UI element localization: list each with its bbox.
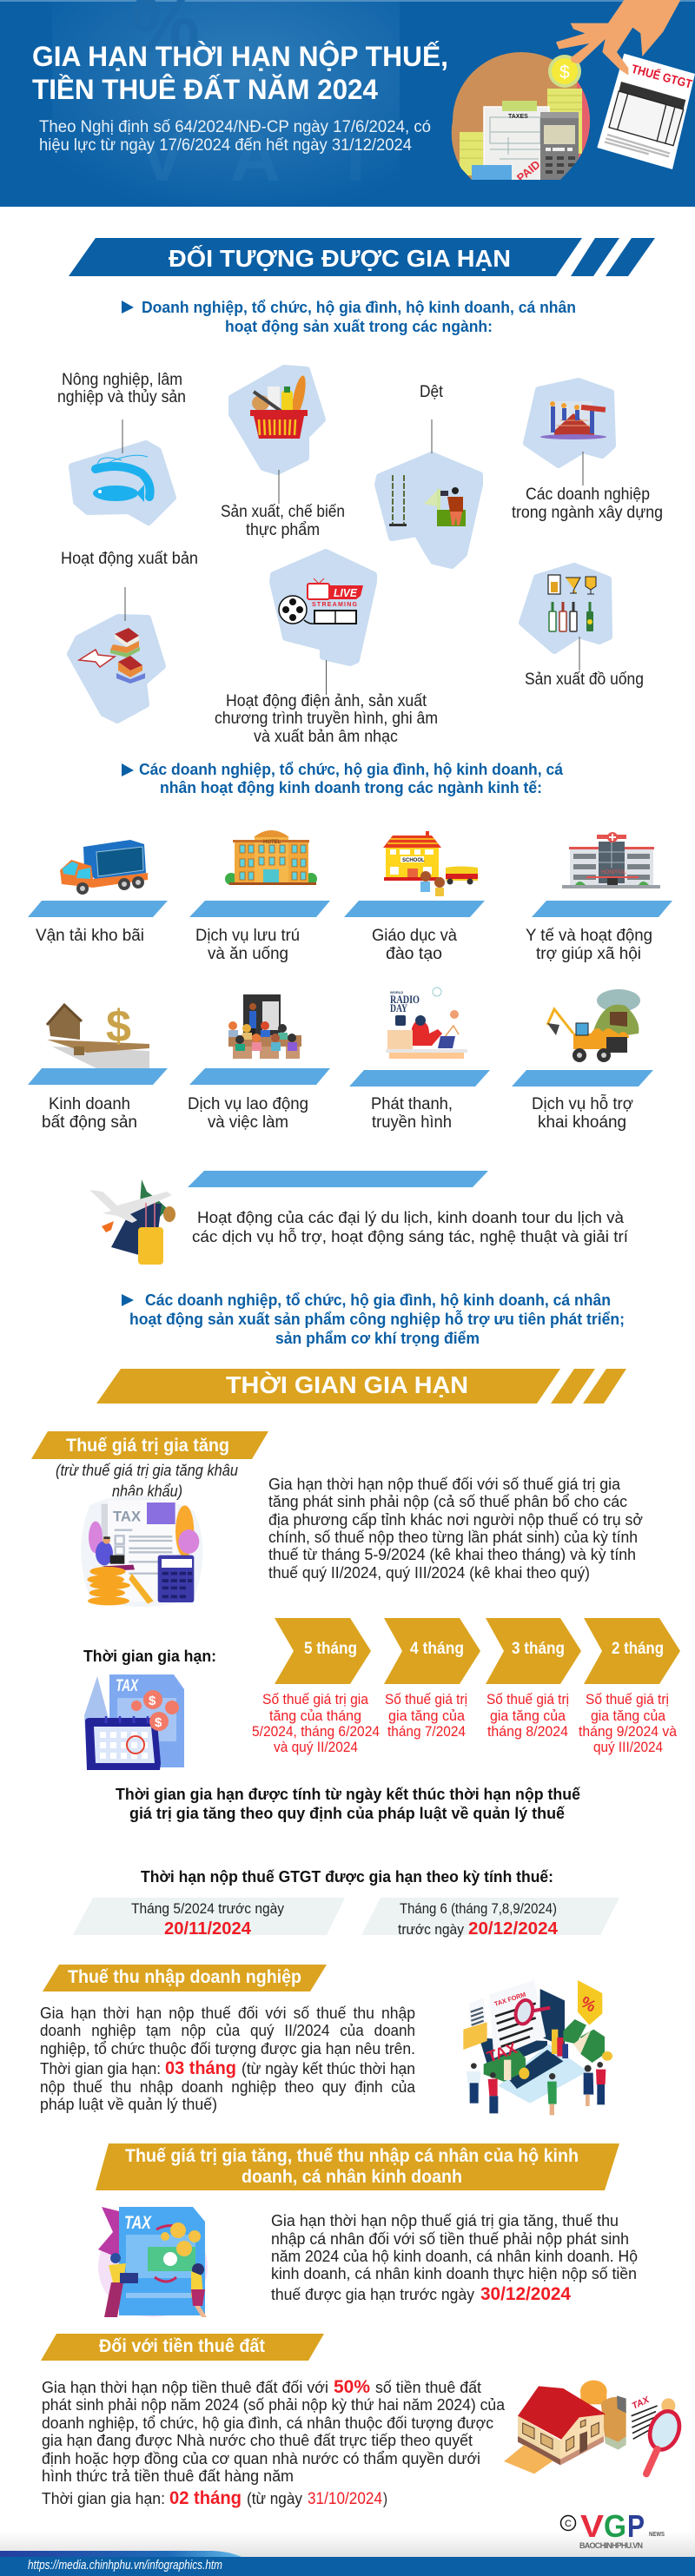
paragraph: tiền thuê đất: 31/10/2024 (308, 2490, 382, 2508)
note: 5 tháng (252, 1692, 380, 1755)
sector: khai khoáng (512, 989, 653, 1132)
note: 5 tháng: 5/2024, tháng 6/2024 (252, 1724, 380, 1740)
paragraph: tiền thuê đất: gia hạn đang được Nhà nước cho thuê đất trực tiếp theo quyết (42, 2431, 473, 2449)
note: 2 tháng: gia tăng của (591, 1708, 666, 1724)
note: cách tính thời gian: giá trị gia tăng theo quy định của pháp luật về quản lý thuế (129, 1804, 566, 1822)
sector: phát thanh: WORLD (390, 990, 403, 994)
paragraph: TNDN: doanh nghiệp tạm nộp của quý II/2024 của doanh (40, 2021, 415, 2039)
sector: phát thanh: truyền hình (372, 1113, 452, 1132)
title (32, 41, 448, 105)
deadline box: tháng 5: Tháng 5/2024 trước ngày (131, 1900, 284, 1917)
industry: điện ảnh: Hoạt động điện ảnh, sản xuất (226, 692, 427, 710)
paragraph: tiền thuê đất: phát sinh phải nộp năm 2024 (số phải nộp kỳ thứ hai năm 2024) của (42, 2395, 506, 2414)
note: 3 tháng: Số thuế giá trị (486, 1692, 569, 1707)
logo: VGP: P (627, 2508, 645, 2544)
note: 2 tháng: quý III/2024 (593, 1740, 663, 1755)
sector: y tế (526, 832, 672, 963)
section banner: đối tượng (69, 238, 655, 276)
industry: điện ảnh: STREAMING (312, 602, 358, 608)
section banner: thời gian (96, 1369, 626, 1404)
paragraph: tiền thuê đất: định hoặc hợp đồng của cơ quan nhà nước có thẩm quyền dưới (42, 2449, 480, 2467)
note: 4 tháng: Số thuế giá trị (385, 1692, 467, 1707)
paragraph: TNDN: 03 tháng (165, 2058, 236, 2078)
paragraph: TNDN: Gia hạn thời hạn nộp thuế đối với số thuế thu nhập (40, 2004, 415, 2022)
paragraph: thuế GTGT: chính, số thuế nộp theo từng lần phát sinh) của kỳ tính (268, 1528, 638, 1546)
heading: thuế GTGT: Thuế giá trị gia tăng (66, 1436, 229, 1456)
chevron timeline (275, 1618, 680, 1684)
sector: lưu trú: và ăn uống (208, 945, 288, 963)
deadline box: tháng 5: 20/11/2024 (164, 1919, 252, 1939)
chevron timeline: 2 tháng (612, 1640, 664, 1658)
subheading: công nghiệp hỗ trợ: sản phẩm cơ khí trọng điểm (275, 1329, 480, 1347)
sector: lao động (188, 994, 330, 1132)
paragraph: tiền thuê đất: 02 tháng (169, 2488, 242, 2508)
icon: tax transfer (98, 2207, 208, 2317)
icon: tax form on laptop: TAX (485, 2038, 520, 2066)
label: thời gian gia hạn: Thời gian gia hạn: (83, 1647, 216, 1665)
chevron timeline: 5 tháng (304, 1640, 357, 1658)
note: 4 tháng (385, 1692, 467, 1740)
icon: tax form on laptop: % (578, 1992, 599, 2016)
heading: hộ kinh doanh (96, 2143, 619, 2190)
paragraph: tiền thuê đất: doanh nghiệp, tổ chức, hộ gia đình, cá nhân thuộc đối tượng được (42, 2414, 493, 2432)
sector: bất động sản: Kinh doanh (49, 1095, 130, 1113)
subheading: công nghiệp hỗ trợ: Các doanh nghiệp, tổ chức, hộ gia đình, hộ kinh doanh, cá nhân (145, 1291, 611, 1309)
paragraph: thuế GTGT: Gia hạn thời hạn nộp thuế đối với số thuế giá trị gia (268, 1475, 621, 1493)
deadline box: tháng 6: Tháng 6 (tháng 7,8,9/2024) (400, 1900, 557, 1917)
industry: đồ uống (522, 566, 644, 689)
paragraph: thuế GTGT: thuế quý II/2024, quý III/2024 (kê khai theo quý) (268, 1563, 590, 1582)
paragraph: thuế GTGT (268, 1475, 643, 1582)
note: 4 tháng: gia tăng của (388, 1708, 466, 1724)
icon: tax documents, calculator, coins in circle (452, 52, 590, 180)
sector: lưu trú (189, 830, 330, 963)
shadow above footer (0, 2532, 695, 2557)
subheading: sản xuất (122, 298, 576, 335)
sector: y tế: trợ giúp xã hội (536, 945, 641, 963)
icon: tax calendar: $ (149, 1694, 156, 1708)
sector: phát thanh: RADIO (390, 993, 420, 1006)
note: 5 tháng: Số thuế giá trị gia (262, 1692, 369, 1707)
deadline box: tháng 6: 20/12/2024 (468, 1919, 559, 1939)
icon: tax form on laptop: TAX FORM (493, 1991, 527, 2008)
paragraph: tiền thuê đất: Gia hạn thời hạn nộp tiền thuê đất đối với (42, 2378, 328, 2396)
logo: VGP: V (580, 2508, 604, 2544)
deadline box: tháng 6: trước ngày (398, 1921, 464, 1938)
icon: hand holding VAT sheet (556, 0, 695, 169)
icon: tax calendar: TAX (116, 1677, 139, 1695)
industry: điện ảnh: chương trình truyền hình, ghi âm (215, 710, 438, 728)
section banner: thời gian: THỜI GIAN GIA HẠN (226, 1371, 468, 1398)
sector: bất động sản: bất động sản (42, 1113, 137, 1132)
sector: lao động: và việc làm (208, 1113, 288, 1132)
paragraph: tiền thuê đất: số tiền thuê đất (375, 2378, 481, 2396)
header band: V (139, 118, 185, 195)
sector: du lịch: các dịch vụ hỗ trợ, hoạt động sáng tác, nghệ thuật và giải trí (192, 1227, 629, 1245)
logo: VGP: BAOCHINHPHU.VN (579, 2541, 643, 2550)
icon: house with coins and magnifier (504, 2381, 685, 2474)
sector: giáo dục: đào tạo (386, 945, 442, 963)
paragraph: thuế GTGT: tăng phát sinh phải nộp (cả số thuế phân bổ cho các (268, 1492, 627, 1510)
paragraph: hộ kinh doanh: kinh doanh, cá nhân kinh doanh thực hiện nộp số tiền (271, 2264, 637, 2282)
paragraph: TNDN (40, 2004, 416, 2113)
industry: nông nghiệp: nghiệp và thủy sản (57, 388, 186, 406)
sector: lưu trú: Dịch vụ lưu trú (195, 927, 300, 945)
sector: y tế: Y tế và hoạt động (526, 927, 652, 945)
note: 3 tháng: gia tăng của (490, 1708, 566, 1724)
sector: giáo dục: SCHOOL (402, 858, 425, 863)
chevron timeline: 3 tháng (512, 1640, 565, 1658)
paragraph: TNDN: nộp thuế thu nhập doanh nghiệp theo quy định của (40, 2077, 416, 2096)
industry: thực phẩm (221, 368, 345, 539)
icon: tax documents, calculator, coins in circle: $ (559, 63, 570, 83)
subheading: công nghiệp hỗ trợ: hoạt động sản xuất sản phẩm công nghiệp hỗ trợ ưu tiên phát triển; (129, 1310, 625, 1328)
note: 2 tháng (579, 1692, 678, 1755)
subheading: kinh doanh: nhân hoạt động kinh doanh trong các ngành kinh tế: (160, 778, 542, 796)
icon: tax form on laptop (463, 1980, 612, 2115)
paragraph: hộ kinh doanh (271, 2211, 638, 2304)
industry: xuất bản (61, 550, 198, 720)
paragraph: tiền thuê đất: Thời gian gia hạn: (42, 2489, 165, 2507)
paragraph: thuế GTGT: địa phương cấp tỉnh khác nơi người nộp thuế có trụ sở (268, 1510, 643, 1529)
heading: TNDN: Thuế thu nhập doanh nghiệp (68, 1967, 301, 1987)
paragraph: TNDN: nghiệp, tổ chức thuộc đối tượng được gia hạn nêu trên. (40, 2039, 415, 2057)
industry: dệt: Dệt (420, 383, 444, 401)
sector: lao động: Dịch vụ lao động (188, 1095, 308, 1113)
note: trừ nhập khẩu: (trừ thuế giá trị gia tăng khâu (56, 1462, 238, 1479)
title: GIA HẠN THỜI HẠN NỘP THUẾ, (32, 41, 448, 72)
deadline box: tháng 6 (361, 1898, 619, 1939)
note: trừ nhập khẩu: nhập khẩu) (112, 1483, 182, 1500)
footer bar: https://media.chinhphu.vn/infographics.htm (28, 2558, 222, 2573)
industry: thực phẩm: thực phẩm (246, 521, 320, 539)
sector: khai khoáng: khai khoáng (538, 1113, 626, 1132)
logo: VGP (561, 2508, 665, 2550)
note: 3 tháng (486, 1692, 569, 1740)
logo: VGP: NEWS (649, 2532, 665, 2538)
note: 2 tháng: Số thuế giá trị (586, 1692, 669, 1707)
sector: bất động sản: $ (106, 1001, 131, 1052)
paragraph: tiền thuê đất: 50% (334, 2377, 370, 2397)
paragraph: hộ kinh doanh: Gia hạn thời hạn nộp thuế giá trị gia tăng, thuế thu (271, 2211, 619, 2229)
note: cách tính thời gian (116, 1785, 581, 1822)
icon: house with coins and magnifier: TAX (631, 2394, 652, 2412)
subheading: kinh doanh (122, 760, 564, 796)
sector: giáo dục (344, 831, 485, 963)
paragraph: hộ kinh doanh: năm 2024 của hộ kinh doanh, cá nhân kinh doanh. Hộ (271, 2247, 638, 2265)
icon: tax form with coins: TAX (113, 1509, 141, 1525)
heading: TNDN (43, 1965, 327, 1991)
icon: tax documents, calculator, coins in circle: TAXES (508, 114, 528, 120)
industry: xây dựng (512, 381, 663, 522)
industry: điện ảnh: LIVE (334, 586, 357, 599)
icon: tax calendar (84, 1674, 184, 1770)
paragraph: TNDN: pháp luật về quản lý thuế) (40, 2095, 217, 2113)
sector: du lịch (89, 1171, 629, 1265)
note: cách tính thời gian: Thời gian gia hạn được tính từ ngày kết thúc thời hạn nộp thuế (116, 1785, 581, 1803)
logo: VGP: G (604, 2508, 626, 2544)
section banner: đối tượng: ĐỐI TƯỢNG ĐƯỢC GIA HẠN (169, 244, 511, 272)
chevron timeline: 4 tháng (410, 1640, 464, 1658)
heading: hộ kinh doanh: Thuế giá trị gia tăng, thuế thu nhập cá nhân của hộ kinh (125, 2146, 579, 2166)
sector: vận tải: Vận tải kho bãi (36, 927, 144, 945)
subheading: công nghiệp hỗ trợ (122, 1291, 625, 1347)
heading: tiền thuê đất (41, 2334, 324, 2361)
subheading: kinh doanh: Các doanh nghiệp, tổ chức, hộ gia đình, hộ kinh doanh, cá (139, 760, 564, 778)
title: TIỀN THUÊ ĐẤT NĂM 2024 (32, 74, 378, 105)
icon: tax documents, calculator, coins in circle: PAID (514, 157, 543, 184)
footer bar (0, 2551, 695, 2576)
subtitle (39, 118, 431, 155)
sector: du lịch: Hoạt động của các đại lý du lịch, kinh doanh tour du lịch và (197, 1208, 625, 1226)
heading: hộ kinh doanh: doanh, cá nhân kinh doanh (242, 2167, 462, 2187)
industry: xuất bản: Hoạt động xuất bản (61, 550, 198, 568)
paragraph: TNDN: Thời gian gia hạn: (40, 2059, 161, 2077)
industry: xây dựng: trong ngành xây dựng (512, 504, 663, 522)
note: 4 tháng: tháng 7/2024 (387, 1724, 466, 1740)
sector: khai khoáng: Dịch vụ hỗ trợ (532, 1094, 633, 1113)
subtitle: hiệu lực từ ngày 17/6/2024 đến hết ngày 31/12/2024 (39, 136, 412, 155)
logo: VGP: C (565, 2519, 572, 2529)
heading: thời hạn nộp: Thời hạn nộp thuế GTGT được gia hạn theo kỳ tính thuế: (141, 1867, 553, 1886)
subtitle: Theo Nghị định số 64/2024/NĐ-CP ngày 17/6/2024, có (39, 118, 431, 136)
sector: lưu trú: HOTEL (263, 840, 281, 845)
paragraph: hộ kinh doanh: 30/12/2024 (480, 2284, 571, 2304)
industry: thực phẩm: Sản xuất, chế biến (221, 503, 345, 521)
sector: giáo dục: Giáo dục và (372, 927, 457, 945)
deadline box: tháng 5 (73, 1898, 345, 1939)
icon: tax calendar: $ (155, 1715, 162, 1730)
sector: bất động sản (28, 1001, 168, 1132)
sector: vận tải (28, 840, 168, 945)
paragraph: tiền thuê đất (42, 2377, 506, 2508)
industry: điện ảnh: và xuất bản âm nhạc (254, 728, 398, 746)
header band (0, 0, 695, 207)
header band: T (334, 118, 377, 195)
paragraph: tiền thuê đất: ) (383, 2489, 387, 2507)
sector: phát thanh: Phát thanh, (371, 1095, 453, 1113)
industry: điện ảnh (215, 552, 438, 746)
industry: nông nghiệp (57, 371, 186, 522)
header band: A (230, 118, 281, 195)
note: trừ nhập khẩu (56, 1462, 238, 1500)
sector: y tế: HOSPITAL (601, 870, 627, 875)
industry: đồ uống: Sản xuất đồ uống (525, 670, 644, 689)
icon: tax form with coins (81, 1495, 202, 1607)
industry: nông nghiệp: Nông nghiệp, lâm (62, 371, 182, 389)
note: 5 tháng: tăng của tháng (269, 1708, 361, 1724)
note: 3 tháng: tháng 8/2024 (487, 1724, 568, 1740)
note: 5 tháng: và quý II/2024 (274, 1740, 358, 1755)
heading: tiền thuê đất: Đối với tiền thuê đất (99, 2336, 265, 2356)
industry: dệt (378, 383, 480, 565)
paragraph: TNDN: (từ ngày kết thúc thời hạn (242, 2059, 415, 2077)
note: 2 tháng: tháng 9/2024 và (579, 1724, 678, 1740)
paragraph: hộ kinh doanh: thuế được gia hạn trước ngày (271, 2285, 475, 2303)
subheading: sản xuất: hoạt động sản xuất trong các ngành: (225, 317, 493, 335)
sector: phát thanh (349, 987, 490, 1132)
paragraph: tiền thuê đất: (từ ngày (247, 2489, 303, 2507)
heading: thuế GTGT (31, 1431, 268, 1459)
paragraph: tiền thuê đất: hình thức trả tiền thuê đất hàng năm (42, 2467, 294, 2485)
icon: tax transfer: TAX (124, 2213, 153, 2233)
paragraph: hộ kinh doanh: nhập cá nhân đối với số tiền thuế phải nộp phát sinh (271, 2229, 629, 2248)
subheading: sản xuất: Doanh nghiệp, tổ chức, hộ gia đình, hộ kinh doanh, cá nhân (142, 298, 576, 316)
paragraph: thuế GTGT: thuế từ tháng 5-9/2024 (kê khai theo tháng) và kỳ tính (268, 1545, 636, 1563)
industry: xây dựng: Các doanh nghiệp (526, 485, 650, 504)
sector: phát thanh: DAY (390, 1001, 407, 1014)
